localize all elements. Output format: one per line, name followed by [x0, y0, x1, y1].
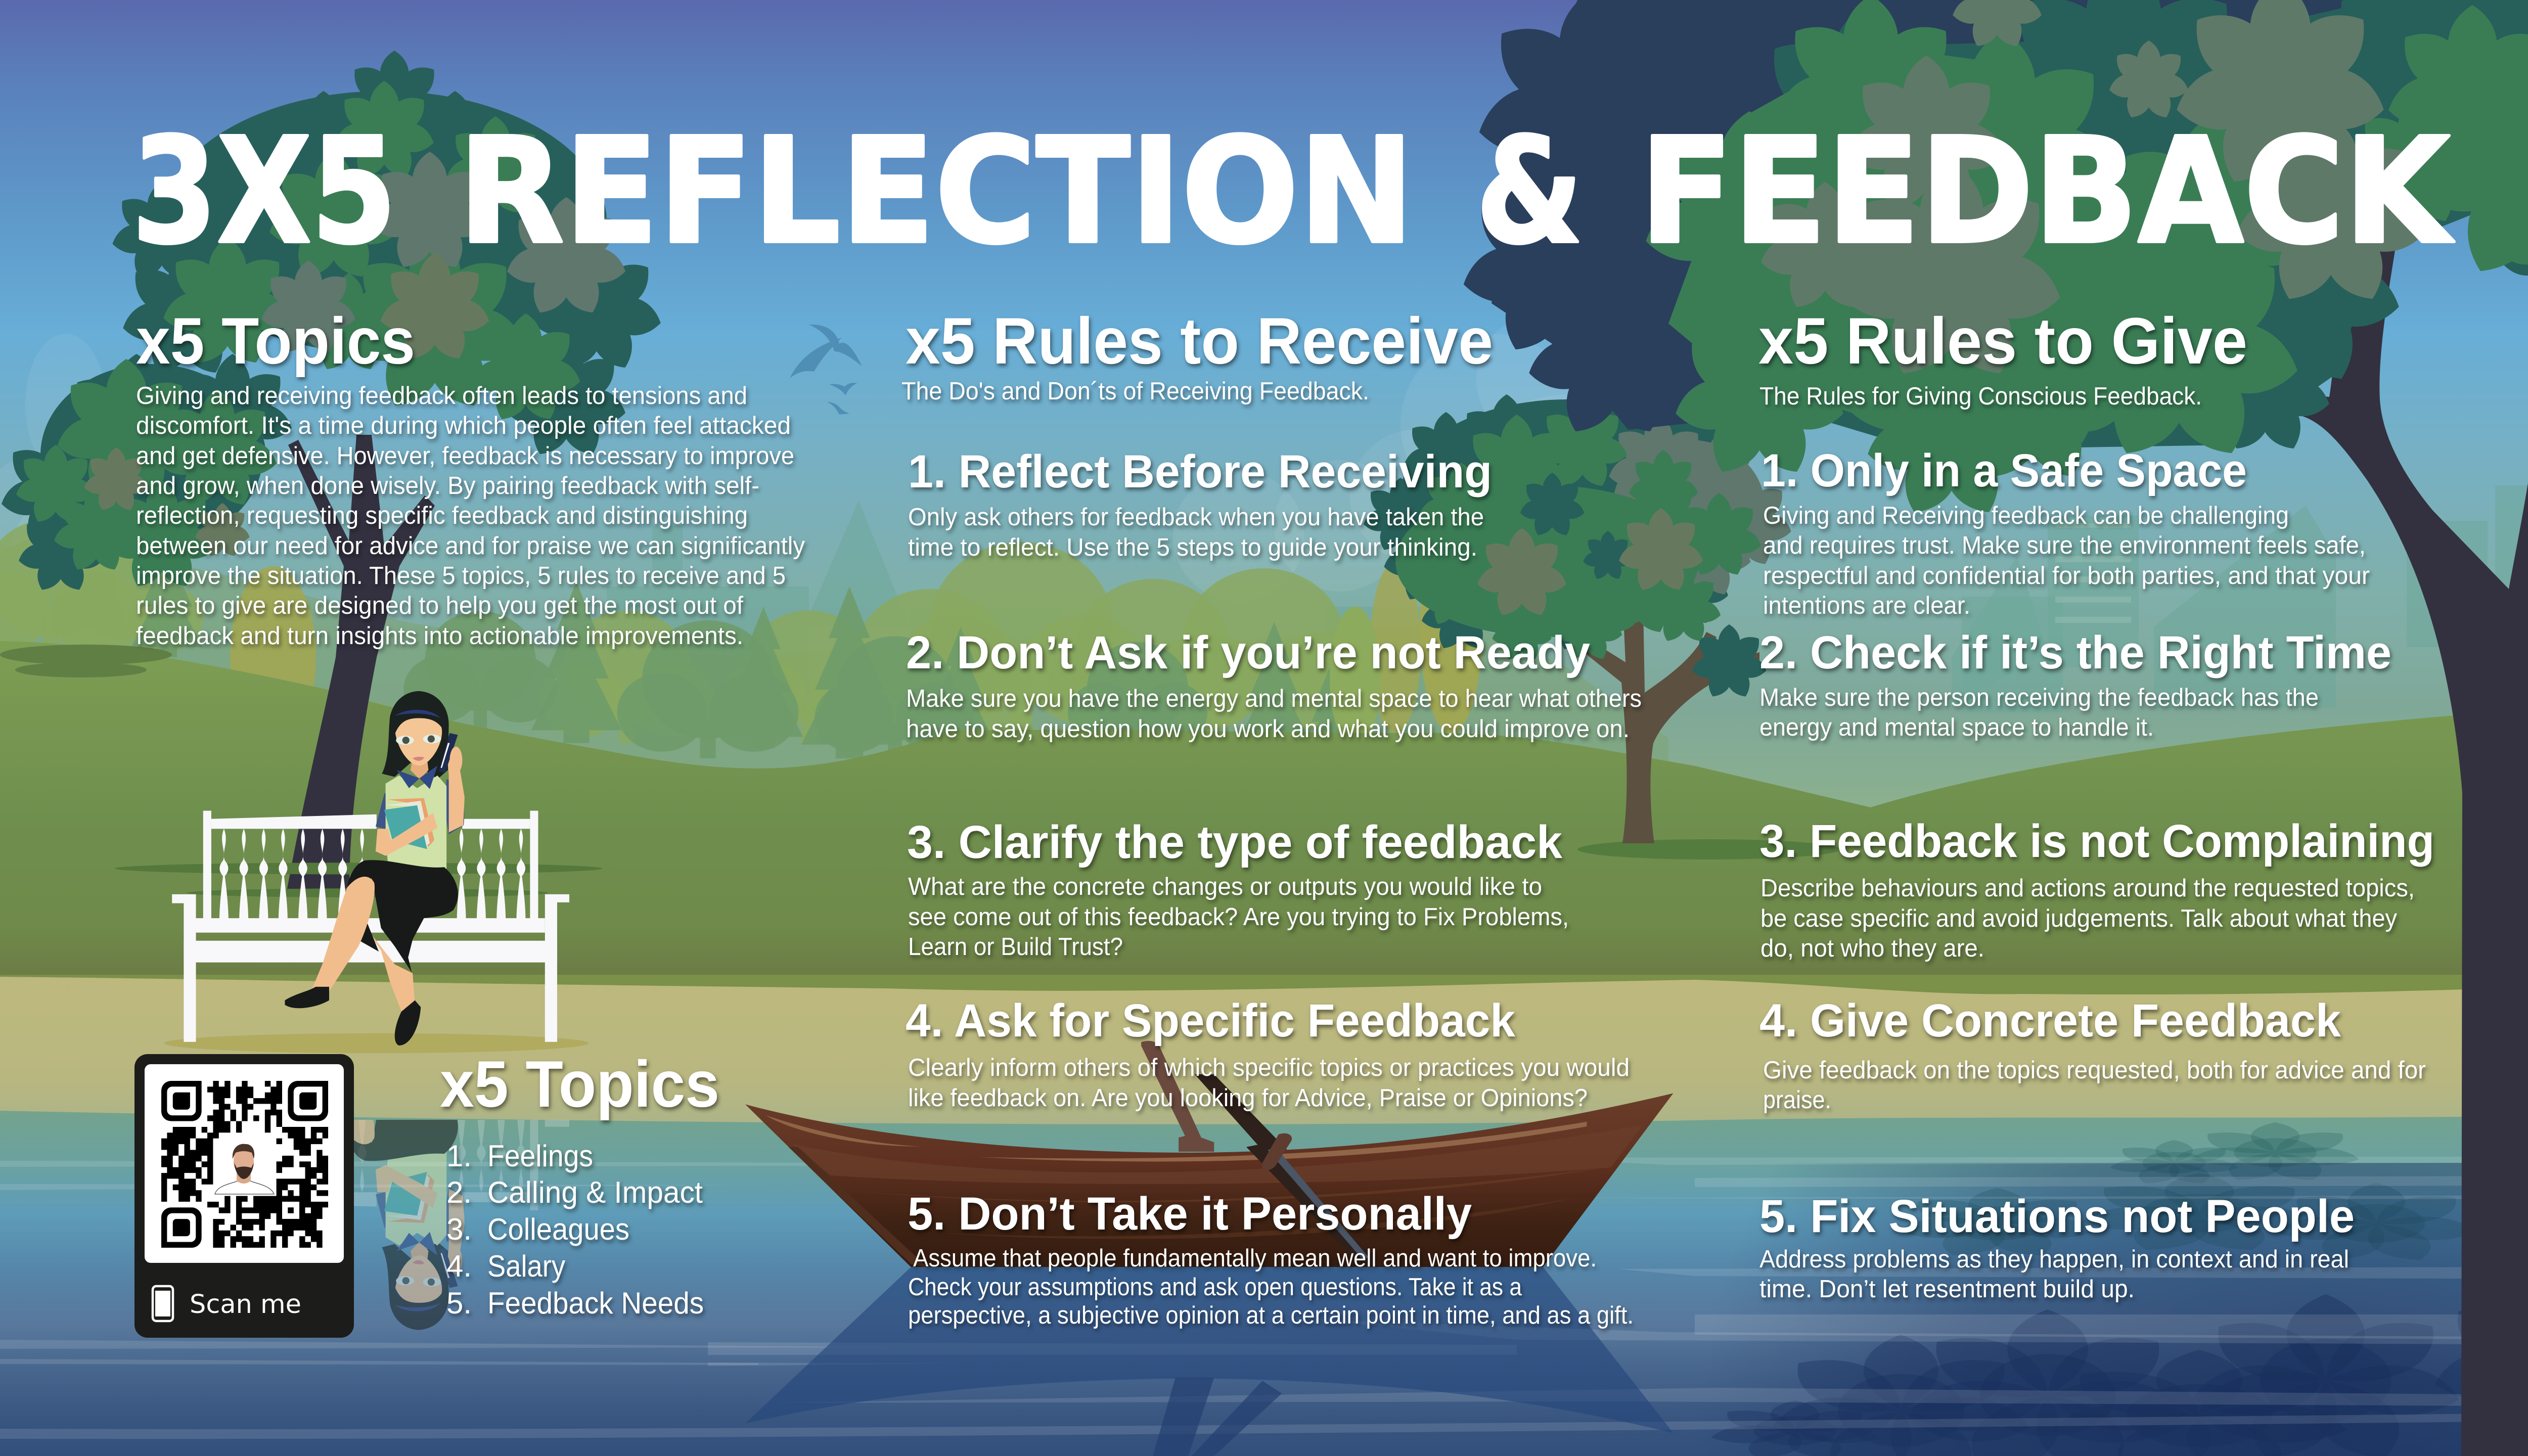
- rule 3: 3. Clarify the type of feedback: [907, 816, 1563, 868]
- rule 2: energy and mental space to handle it.: [1759, 714, 2154, 741]
- mid tree foliage: [1361, 369, 1794, 701]
- QR code card: [134, 1054, 354, 1338]
- tree shadows on hill: [0, 645, 172, 677]
- intro text: between our need for advice and for praise we can significantly: [136, 532, 805, 560]
- intro text: and grow, when done wisely. By pairing feedback with self-: [136, 472, 759, 499]
- rule 5: [1759, 1191, 2355, 1303]
- rule 4: praise.: [1763, 1086, 1831, 1114]
- rule 1: Only ask others for feedback when you have taken the: [908, 504, 1484, 531]
- rule 3: see come out of this feedback? Are you trying to Fix Problems,: [908, 903, 1569, 931]
- distant forest: [0, 519, 1668, 809]
- rule 5: 5. Fix Situations not People: [1759, 1191, 2355, 1242]
- hull: [745, 1093, 1673, 1267]
- lake water: [0, 1111, 2528, 1456]
- topics list: 4.: [446, 1249, 472, 1283]
- title: FEEDBACK: [1640, 107, 2455, 276]
- rule 1: 1. Only in a Safe Space: [1761, 445, 2247, 496]
- rule 4: 4. Give Concrete Feedback: [1759, 995, 2341, 1046]
- intro text: discomfort. It's a time during which people often feel attacked: [136, 412, 791, 439]
- bench: [172, 811, 569, 1042]
- rule 5: perspective, a subjective opinion at a certain point in time, and as a gift.: [908, 1302, 1634, 1329]
- topics list: 1.: [446, 1139, 472, 1173]
- big tree trunk: [2241, 243, 2528, 1456]
- lake reflections: [172, 976, 2528, 1456]
- rule 5: [908, 1188, 1634, 1329]
- hull highlights: [766, 1115, 1643, 1267]
- rule 2: [906, 627, 1642, 743]
- topics list: 3.: [446, 1212, 472, 1246]
- water streaks: [0, 1157, 2528, 1439]
- subtitle: The Do's and Don´ts of Receiving Feedback.: [901, 378, 1369, 405]
- topics list: Feelings: [487, 1139, 593, 1173]
- rule 3: Learn or Build Trust?: [908, 933, 1123, 961]
- rule 2: Make sure you have the energy and mental space to hear what others: [906, 685, 1642, 712]
- rule 2: 2. Don’t Ask if you’re not Ready: [906, 627, 1590, 678]
- rule 2: 2. Check if it’s the Right Time: [1759, 627, 2391, 678]
- rule 5: Address problems as they happen, in context and in real: [1759, 1246, 2349, 1273]
- rule 3: do, not who they are.: [1760, 935, 1984, 962]
- intro text: and get defensive. However, feedback is necessary to improve: [136, 442, 794, 470]
- rule 3: be case specific and avoid judgements. Talk about what they: [1760, 905, 2397, 932]
- topics list: 5.: [446, 1286, 472, 1320]
- oar blade over hull: [1246, 1133, 1379, 1264]
- left tree trunk: [286, 435, 435, 894]
- rule 1: and requires trust. Make sure the environment feels safe,: [1763, 532, 2366, 559]
- title: REFLECTION: [458, 107, 1414, 276]
- rule 4: Give feedback on the topics requested, both for advice and for: [1763, 1057, 2426, 1084]
- city windows: [2055, 523, 2131, 623]
- rule 3: Describe behaviours and actions around the requested topics,: [1760, 875, 2415, 902]
- mid tree trunk and shadow: [1577, 607, 1840, 859]
- heading: x5 Rules to Give: x5 Rules to Give: [1758, 304, 2247, 378]
- woman with books and phone: [285, 691, 465, 1045]
- topics list: 2.: [446, 1175, 472, 1209]
- rule 3: What are the concrete changes or outputs you would like to: [908, 873, 1542, 900]
- intro text: reflection, requesting specific feedback and distinguishing: [136, 502, 748, 529]
- rule 4: Clearly inform others of which specific topics or practices you would: [908, 1054, 1630, 1081]
- right water darkening: [1618, 1163, 2528, 1456]
- panel: x5 Rules to Receive: [901, 304, 1642, 1329]
- rule 4: like feedback on. Are you looking for Advice, Praise or Opinions?: [908, 1084, 1588, 1112]
- panel: x5 Topics introduction: [136, 304, 805, 650]
- subtitle: The Rules for Giving Conscious Feedback.: [1759, 383, 2202, 410]
- bench shadow: [115, 862, 602, 1053]
- rule 1: 1. Reflect Before Receiving: [908, 446, 1492, 497]
- topics list: Salary: [487, 1249, 565, 1283]
- rule 5: time. Don’t let resentment build up.: [1759, 1276, 2135, 1303]
- rule 4: [906, 995, 1630, 1112]
- QR modules: [161, 1081, 328, 1248]
- rule 1: Giving and Receiving feedback can be challenging: [1763, 502, 2289, 529]
- rule 2: [1759, 627, 2391, 741]
- intro text: feedback and turn insights into actionable improvements.: [136, 622, 743, 650]
- intro text: Giving and receiving feedback often leads to tensions and: [136, 382, 747, 410]
- intro text: [136, 382, 805, 650]
- big tree foliage: [1458, 0, 2528, 523]
- clouds: [0, 313, 1689, 622]
- rule 3: [1759, 815, 2434, 962]
- title: [132, 107, 2455, 276]
- oars: [1141, 1041, 1385, 1251]
- distant city skyline: [607, 485, 2528, 713]
- panel: x5 Rules to Give: [1758, 304, 2434, 1303]
- rule 5: Check your assumptions and ask open questions. Take it as a: [908, 1273, 1522, 1301]
- rule 2: have to say, question how you work and what you could improve on.: [906, 715, 1630, 743]
- heading: x5 Rules to Receive: x5 Rules to Receive: [906, 304, 1493, 378]
- rule 2: Make sure the person receiving the feedback has the: [1759, 684, 2319, 711]
- rule 1: [1761, 445, 2370, 619]
- rule 1: respectful and confidential for both parties, and that your: [1763, 562, 2370, 589]
- title: &: [1476, 107, 1583, 276]
- rule 3: [907, 816, 1569, 961]
- rule 4: 4. Ask for Specific Feedback: [906, 995, 1516, 1046]
- topics list: Colleagues: [487, 1212, 629, 1246]
- title: 3X5: [132, 107, 396, 276]
- rule 5: 5. Don’t Take it Personally: [908, 1188, 1472, 1240]
- topics list: [446, 1139, 704, 1320]
- green hills: [0, 641, 2528, 996]
- rowing boat: [745, 1041, 1673, 1267]
- intro text: rules to give are designed to help you get the most out of: [136, 592, 743, 619]
- intro text: improve the situation. These 5 topics, 5 rules to receive and 5: [136, 562, 786, 589]
- birds: [790, 325, 862, 415]
- beach sand: [0, 977, 2528, 1143]
- rule 1: intentions are clear.: [1763, 592, 1970, 619]
- rule 1: time to reflect. Use the 5 steps to guide your thinking.: [908, 534, 1477, 561]
- heading: x5 Topics: x5 Topics: [440, 1047, 719, 1121]
- rule 1: [908, 446, 1492, 561]
- left tree foliage: [0, 51, 665, 595]
- hill foreground band: [0, 975, 2528, 1005]
- topics list: Calling & Impact: [487, 1175, 703, 1209]
- illustration: woman on bench: [172, 691, 569, 1045]
- panel: x5 Topics list: [440, 1047, 719, 1320]
- topics list: Feedback Needs: [487, 1286, 704, 1320]
- boat reflection: [745, 1267, 1673, 1456]
- sky background: [0, 0, 2528, 1011]
- scan me label: Scan me: [190, 1290, 301, 1320]
- rule 3: 3. Feedback is not Complaining: [1759, 815, 2434, 867]
- rule 5: Assume that people fundamentally mean well and want to improve.: [913, 1245, 1597, 1272]
- rule 4: [1759, 995, 2426, 1114]
- portrait in QR centre: [215, 1144, 274, 1194]
- icon: phone: [153, 1286, 173, 1321]
- heading: x5 Topics: x5 Topics: [136, 304, 415, 378]
